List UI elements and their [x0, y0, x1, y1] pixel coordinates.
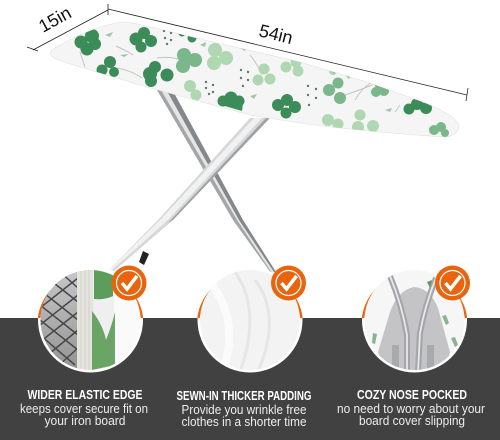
detail 3: cozy nose pocked: [362, 268, 467, 373]
photo: elastic edge: [38, 268, 143, 373]
circle border: [362, 268, 467, 372]
ironing board with clover cover: [50, 22, 459, 137]
dimension: 15in: [27, 3, 108, 51]
caption: sewn-in thicker padding: clothes in a shorter time: [182, 415, 307, 429]
check badge 1: [112, 266, 146, 300]
photo: board underside: [362, 268, 467, 373]
caption: sewn-in thicker padding: [176, 389, 312, 429]
ironing board legs: [110, 90, 276, 273]
dimension: 54in: [108, 9, 468, 101]
small leaves: [105, 32, 392, 112]
caption: wider elastic edge: WIDER ELASTIC EDGE: [28, 388, 142, 402]
light clovers: [184, 43, 379, 133]
check badge 3: [435, 266, 470, 300]
caption: wider elastic edge: keeps cover secure fit on: [20, 402, 148, 416]
medium clovers: [176, 48, 449, 137]
circle border: [198, 268, 302, 372]
caption: sewn-in thicker padding: SEWN-IN THICKER PADDING: [176, 389, 312, 403]
circle border: [38, 268, 143, 372]
detail 2: sewn-in thicker padding: [198, 268, 303, 373]
sprigs: [163, 30, 317, 106]
stems: [80, 46, 400, 112]
detail 1: wider elastic edge: [38, 268, 143, 373]
photo: padding: [198, 268, 303, 373]
dimension: 15in: 15in: [35, 3, 75, 36]
caption: sewn-in thicker padding: Provide you wrinkle free: [182, 403, 307, 417]
check badge 2: [271, 266, 306, 300]
caption: cozy nose pocked: [337, 388, 485, 428]
caption: cozy nose pocked: COZY NOSE POCKED: [357, 388, 467, 402]
caption: cozy nose pocked: no need to worry about your: [337, 402, 485, 416]
caption: wider elastic edge: your iron board: [44, 414, 126, 428]
dark band: [0, 318, 500, 440]
dark clovers: [74, 27, 432, 118]
dimension: 54in: 54in: [257, 20, 295, 48]
caption: cozy nose pocked: board cover slipping: [359, 414, 465, 428]
caption: wider elastic edge: [20, 388, 148, 428]
